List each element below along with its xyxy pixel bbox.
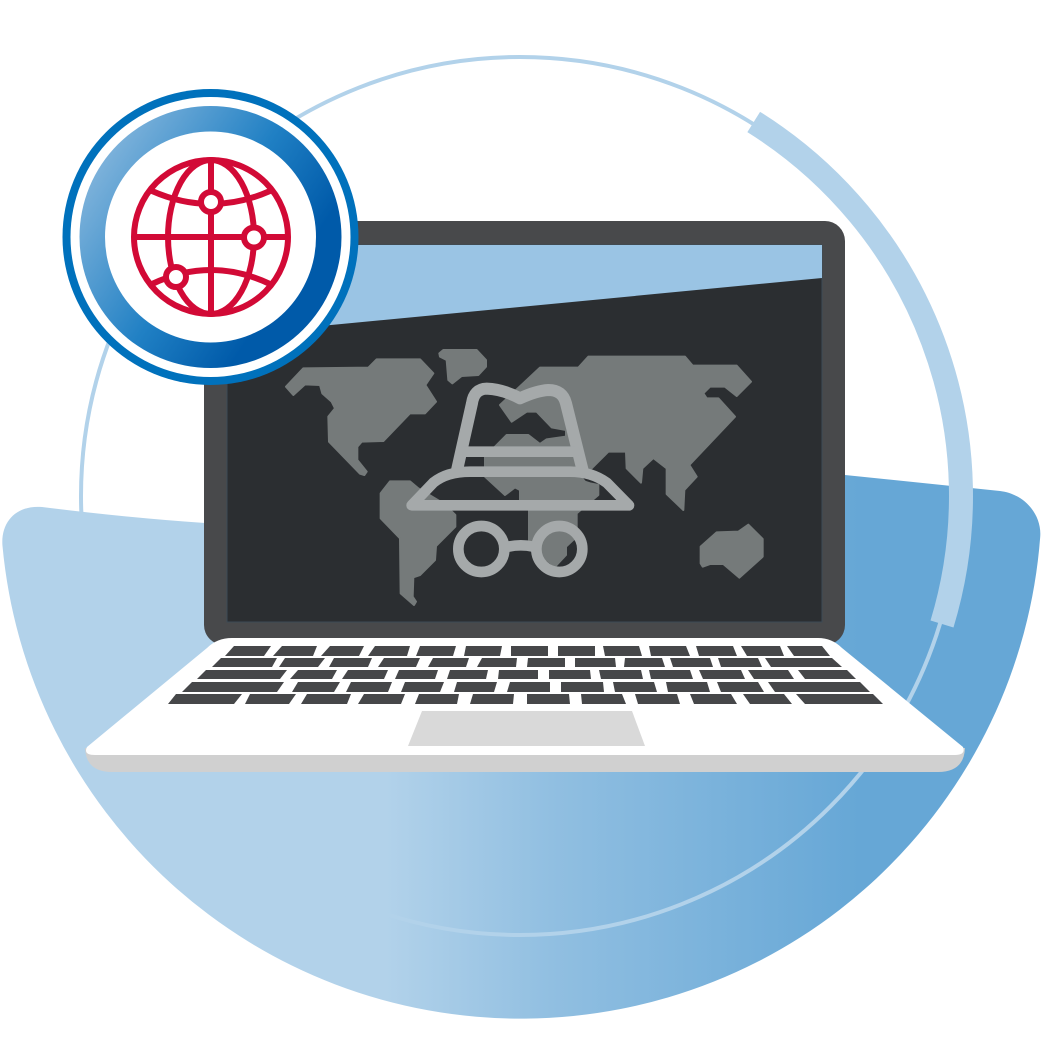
keyboard bbox=[168, 646, 883, 704]
badge gradient ring bbox=[80, 106, 342, 368]
badge inner disc bbox=[105, 132, 316, 342]
badge white gap bbox=[70, 97, 350, 377]
icon: network globe bbox=[134, 160, 288, 314]
world map bbox=[286, 350, 763, 605]
trackpad bbox=[408, 711, 645, 746]
thin ring bbox=[81, 57, 959, 935]
laptop screen bbox=[227, 245, 822, 622]
laptop bbox=[85, 221, 965, 772]
laptop base deck bbox=[86, 638, 964, 755]
badge outer ring bbox=[62, 89, 358, 385]
globe badge bbox=[62, 89, 358, 385]
laptop base lip bbox=[85, 748, 965, 772]
laptop lid bbox=[204, 221, 845, 645]
background shape bbox=[2, 475, 1040, 1019]
screen highlight bbox=[227, 245, 822, 335]
incognito hat and glasses icon bbox=[412, 389, 629, 572]
thick ring arc bbox=[754, 122, 961, 624]
